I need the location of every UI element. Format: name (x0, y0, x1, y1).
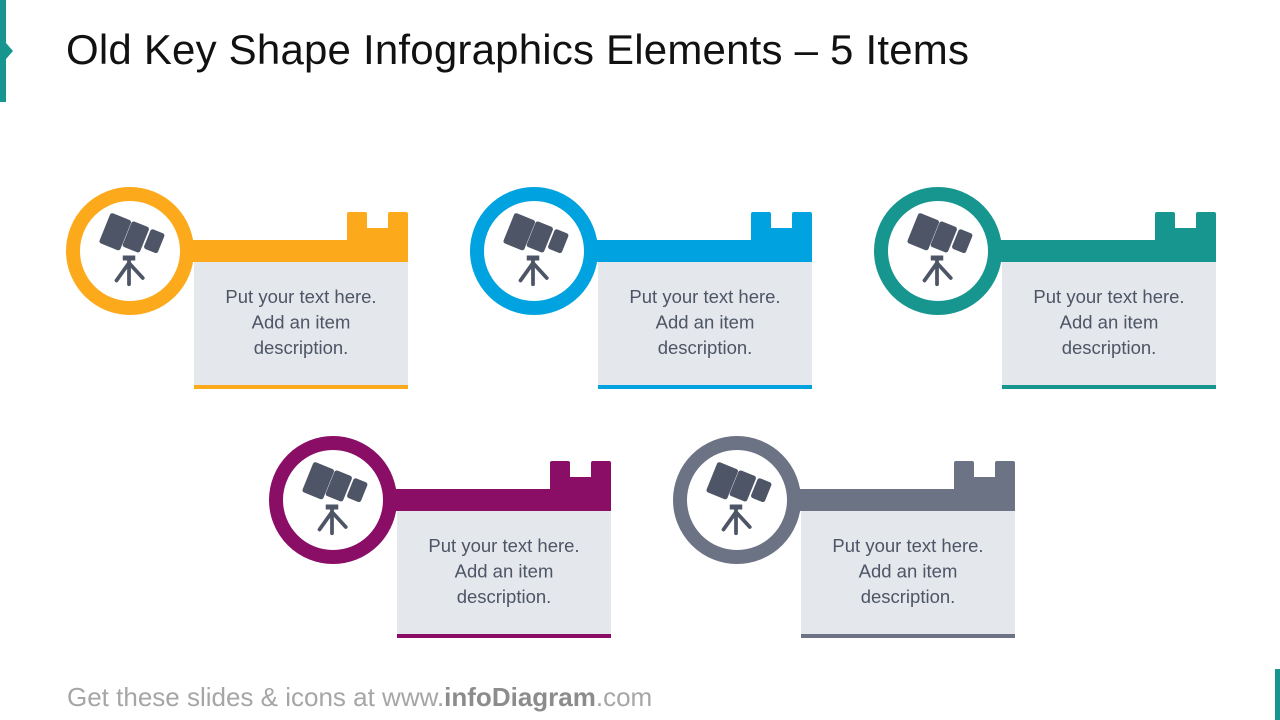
key 5: gray: Put your text here. (832, 535, 984, 556)
key 3: teal (881, 194, 1216, 389)
key 2: blue (477, 194, 812, 389)
key 4: purple: Put your text here. (428, 535, 580, 556)
key 4: purple: description. (457, 586, 551, 607)
key 1: orange: Put your text here. (225, 286, 377, 307)
key 4: purple: Add an item (455, 560, 553, 582)
key 3: teal: Add an item (1060, 312, 1158, 332)
key 1: orange: Add an item (252, 312, 350, 332)
key 3: teal: Put your text here. (1033, 286, 1185, 307)
title: Old Key Shape Infographics Elements – 5 Items (66, 26, 969, 73)
key 1: orange: description. (254, 337, 348, 358)
key 5: gray: description. (861, 586, 955, 607)
key 2: blue: Put your text here. (629, 286, 781, 307)
key 4: purple (276, 443, 611, 638)
accent arrow (6, 43, 13, 59)
key 2: blue: Add an item (656, 312, 754, 332)
key 5: gray: Add an item (859, 560, 957, 582)
key 5: gray (680, 443, 1015, 638)
accent bar (0, 0, 6, 102)
corner accent (1275, 669, 1280, 720)
key 1: orange (73, 194, 408, 389)
key 3: teal: description. (1062, 337, 1156, 358)
footer: Get these slides & icons at www.infoDiagram.com (67, 682, 652, 712)
key 2: blue: description. (658, 337, 752, 358)
